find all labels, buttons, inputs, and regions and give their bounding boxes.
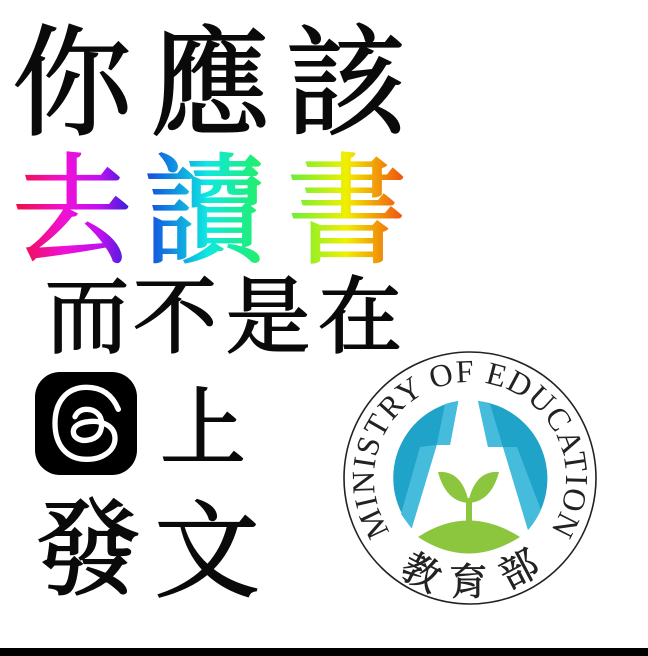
- rainbow heading: 去讀書: [12, 146, 407, 279]
- logo: Ministry of Education seal: [343, 351, 597, 605]
- text: 文: 文: [154, 494, 260, 611]
- rainbow heading: 去讀書: 書: [287, 146, 407, 279]
- seal Chinese text: 部: [493, 543, 546, 598]
- rainbow heading: 去讀書: 讀: [144, 146, 271, 279]
- seal sprout: [418, 472, 520, 554]
- heading line: 你應該: 應: [150, 18, 272, 151]
- seal curved text: MINISTRY OF EDUCATION: [352, 360, 588, 540]
- text line: 而不是在: 不: [133, 272, 217, 365]
- heading line: 你應該: [12, 18, 407, 151]
- text line: 而不是在: [45, 272, 402, 365]
- rainbow heading: 去讀書: 去: [12, 146, 132, 279]
- icon: Threads logo: [35, 372, 137, 475]
- text: 發: 發: [35, 492, 141, 609]
- bottom black bar: [0, 648, 648, 656]
- seal right blue shape: [478, 401, 547, 530]
- heading line: 你應該: 你: [12, 18, 135, 151]
- text: 上: 上: [160, 383, 246, 477]
- seal Chinese text: 教: [394, 546, 447, 601]
- text line: 而不是在: 在: [318, 272, 402, 365]
- heading line: 你應該: 該: [286, 18, 407, 151]
- seal Chinese text: [394, 543, 546, 604]
- seal Chinese text: 育: [449, 562, 487, 604]
- text line: 而不是在: 而: [45, 272, 129, 365]
- seal left blue shape: [393, 401, 458, 528]
- seal outer ring: [344, 352, 596, 604]
- text line: 而不是在: 是: [226, 272, 310, 365]
